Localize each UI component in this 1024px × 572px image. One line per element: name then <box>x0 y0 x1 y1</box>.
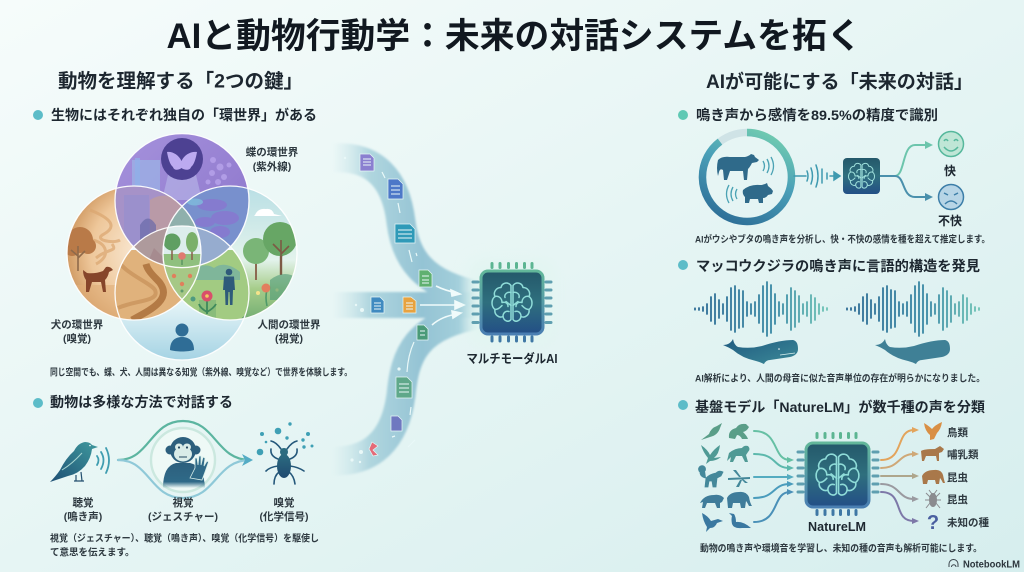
panel: data streams <box>332 154 558 463</box>
venn: outlines <box>67 134 297 360</box>
label: multimodal AI: マルチモーダルAI <box>466 351 558 366</box>
document icons <box>360 154 432 456</box>
waveform 2 <box>847 282 979 336</box>
caption: umwelt: 同じ空間でも、蝶、犬、人間は異なる知覚（紫外線、嗅覚など）で世界を体験します。 <box>50 366 352 378</box>
heading: two keys: 動物を理解する「2つの鍵」 <box>58 70 303 92</box>
icon: monkey <box>163 437 208 488</box>
label: NatureLM: NatureLM <box>808 520 866 534</box>
venn: dog world <box>67 189 132 318</box>
output icons <box>921 422 945 534</box>
icon: beetle <box>257 422 314 484</box>
streams <box>332 158 482 461</box>
venn diagram <box>60 130 300 365</box>
NatureLM chip <box>798 434 878 514</box>
output labels: 哺乳類 <box>947 448 979 461</box>
small AI chip <box>843 158 880 194</box>
caption: NatureLM: 動物の鳴き声や環境音を学習し、未知の種の音声も解析可能にします。 <box>700 542 982 554</box>
label: pleasant: 快 <box>944 163 956 178</box>
icon: bird <box>50 442 109 482</box>
stream arrows <box>420 286 464 325</box>
multimodal AI chip <box>470 260 554 345</box>
icon: whale 2 <box>875 339 950 364</box>
label: unpleasant: 不快 <box>938 213 962 228</box>
output labels: 昆虫 <box>947 493 968 506</box>
output labels <box>947 426 989 529</box>
venn: human icon lobe <box>121 248 242 360</box>
caption: communication: て意思を伝えます。 <box>50 546 135 558</box>
arrow: sensory path <box>118 421 253 498</box>
caption: emotion: AIがウシやブタの鳴き声を分析し、快・不快の感情を種を超えて推定します。 <box>695 234 990 246</box>
label: smell: (化学信号) <box>260 510 308 523</box>
waveform 1 <box>695 282 827 336</box>
venn: butterfly world <box>116 134 248 206</box>
panel: sperm whale <box>678 258 985 384</box>
subheading: emotion: 鳴き声から感情を89.5%の精度で識別 <box>696 107 938 123</box>
label: smell: 嗅覚 <box>274 496 295 509</box>
output labels: 未知の種 <box>947 516 989 529</box>
output labels: 昆虫 <box>947 471 968 484</box>
subheading: umwelt: 生物にはそれぞれ独自の「環世界」がある <box>51 107 317 123</box>
venn: overlaps <box>116 186 248 320</box>
arrows: emotions <box>880 141 933 201</box>
icon: pig <box>726 183 773 203</box>
label: human umwelt: 人間の環世界 <box>258 318 321 331</box>
subheading: whale: マッコウクジラの鳴き声に言語的構造を発見 <box>696 258 980 275</box>
label: hearing: 聴覚 <box>72 496 94 509</box>
title: AIと動物行動学：未来の対話システムを拓く <box>166 17 862 56</box>
venn: human world <box>232 189 296 318</box>
subheading: communication: 動物は多様な方法で対話する <box>50 394 233 410</box>
stream sparkles <box>344 157 417 463</box>
label: butterfly umwelt: (紫外線) <box>253 160 291 173</box>
label: dog umwelt: (嗅覚) <box>63 332 91 345</box>
arrows: inputs <box>754 431 794 522</box>
arrows: outputs <box>881 427 919 524</box>
icon: cow <box>717 154 774 180</box>
label: vision: (ジェスチャー) <box>148 511 218 523</box>
heading: future dialogue: AIが可能にする「未来の対話」 <box>706 70 973 93</box>
label: butterfly umwelt: 蝶の環世界 <box>246 146 299 158</box>
panel: emotion recognition <box>678 107 990 246</box>
label: human umwelt: (視覚) <box>275 332 303 345</box>
icon: sad face <box>938 184 964 210</box>
icon: happy face <box>938 132 964 156</box>
label: hearing: (鳴き声) <box>64 510 102 523</box>
panel: communication <box>33 394 319 558</box>
panel: NatureLM <box>678 399 989 554</box>
sound wave arrow <box>794 165 840 187</box>
caption: communication: 視覚（ジェスチャー）、聴覚（鳴き声）、嗅覚（化学信号）を駆使し <box>50 532 319 544</box>
ring gauge <box>702 132 792 222</box>
output icons: ? <box>927 512 939 534</box>
subheading: NatureLM: 基盤モデル「NatureLM」が数千種の声を分類 <box>695 399 985 415</box>
caption: whale: AI解析により、人間の母音に似た音声単位の存在が明らかになりました。 <box>695 372 985 384</box>
panel: umwelt <box>33 107 352 378</box>
icon: whale 1 <box>723 339 798 364</box>
output labels: 鳥類 <box>947 426 968 439</box>
label: vision: 視覚 <box>172 496 194 509</box>
label: dog umwelt: 犬の環世界 <box>51 318 104 331</box>
animal icons <box>699 423 752 532</box>
